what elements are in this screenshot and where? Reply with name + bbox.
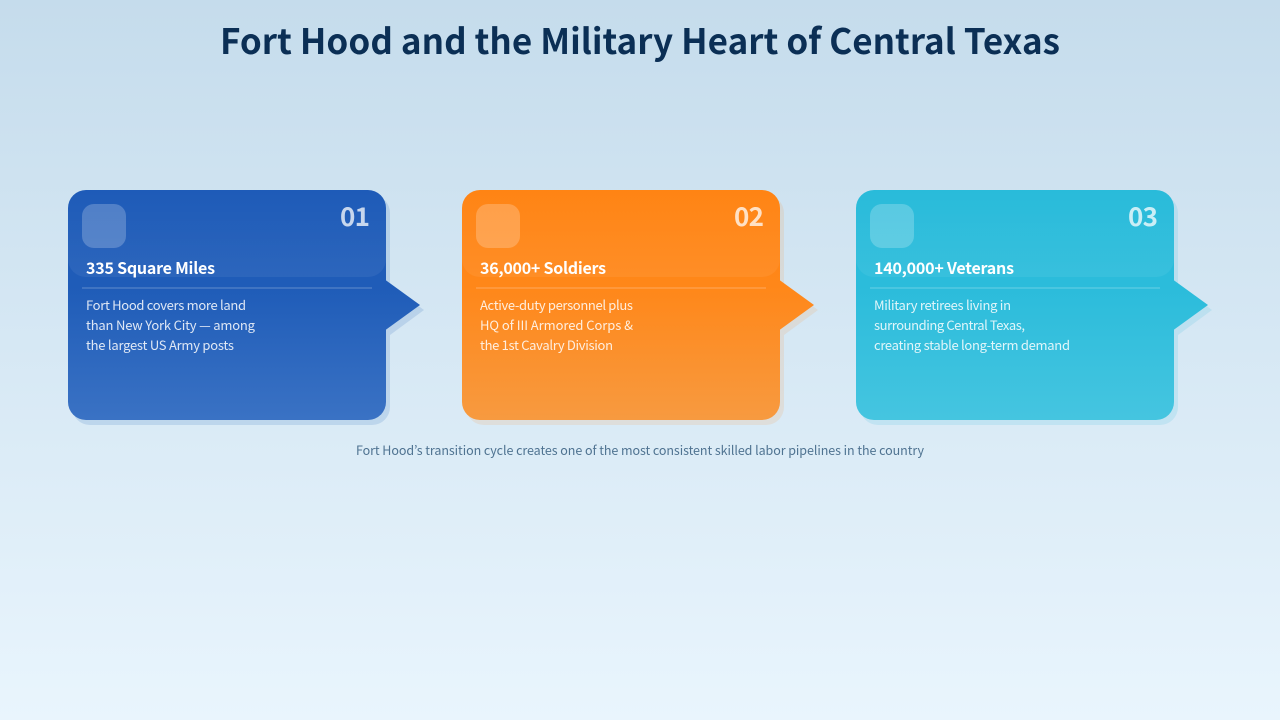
panel: 36,000+ soldiers xyxy=(462,190,818,425)
heading: 335 Square Miles xyxy=(86,255,215,279)
body text: the largest US Army posts xyxy=(86,335,234,354)
body text xyxy=(86,295,256,354)
panel: 335 square miles xyxy=(68,190,424,425)
title: Fort Hood and the Military Heart of Central Texas xyxy=(220,14,1060,65)
body text: Active-duty personnel plus xyxy=(480,295,633,314)
body text: creating stable long-term demand xyxy=(874,335,1070,354)
body text: than New York City — among xyxy=(86,315,256,334)
number: 03 xyxy=(1128,197,1158,234)
divider xyxy=(870,287,1160,289)
card arrow xyxy=(386,280,420,330)
icon placeholder xyxy=(870,204,914,248)
divider xyxy=(476,287,766,289)
heading: 140,000+ Veterans xyxy=(874,255,1014,279)
divider xyxy=(82,287,372,289)
card top highlight xyxy=(68,190,386,277)
body text: Fort Hood covers more land xyxy=(86,295,246,314)
icon placeholder xyxy=(82,204,126,248)
body text: Military retirees living in xyxy=(874,295,1011,314)
card shadow xyxy=(466,195,818,425)
body text: surrounding Central Texas, xyxy=(874,315,1025,334)
card body xyxy=(856,190,1174,420)
card top highlight xyxy=(462,190,780,277)
card body xyxy=(68,190,386,420)
panel: 140,000+ veterans xyxy=(856,190,1212,425)
number: 02 xyxy=(734,197,764,234)
footer note: Fort Hood’s transition cycle creates one of the most consistent skilled labor pipelines in the country xyxy=(356,440,924,459)
card body xyxy=(462,190,780,420)
body text xyxy=(874,295,1070,354)
card shadow xyxy=(72,195,424,425)
number: 01 xyxy=(340,197,370,234)
card top highlight xyxy=(856,190,1174,277)
body text xyxy=(480,295,633,354)
heading: 36,000+ Soldiers xyxy=(480,255,606,279)
body text: the 1st Cavalry Division xyxy=(480,335,613,354)
card arrow xyxy=(780,280,814,330)
body text: HQ of III Armored Corps & xyxy=(480,315,633,334)
icon placeholder xyxy=(476,204,520,248)
card shadow xyxy=(860,195,1212,425)
card arrow xyxy=(1174,280,1208,330)
